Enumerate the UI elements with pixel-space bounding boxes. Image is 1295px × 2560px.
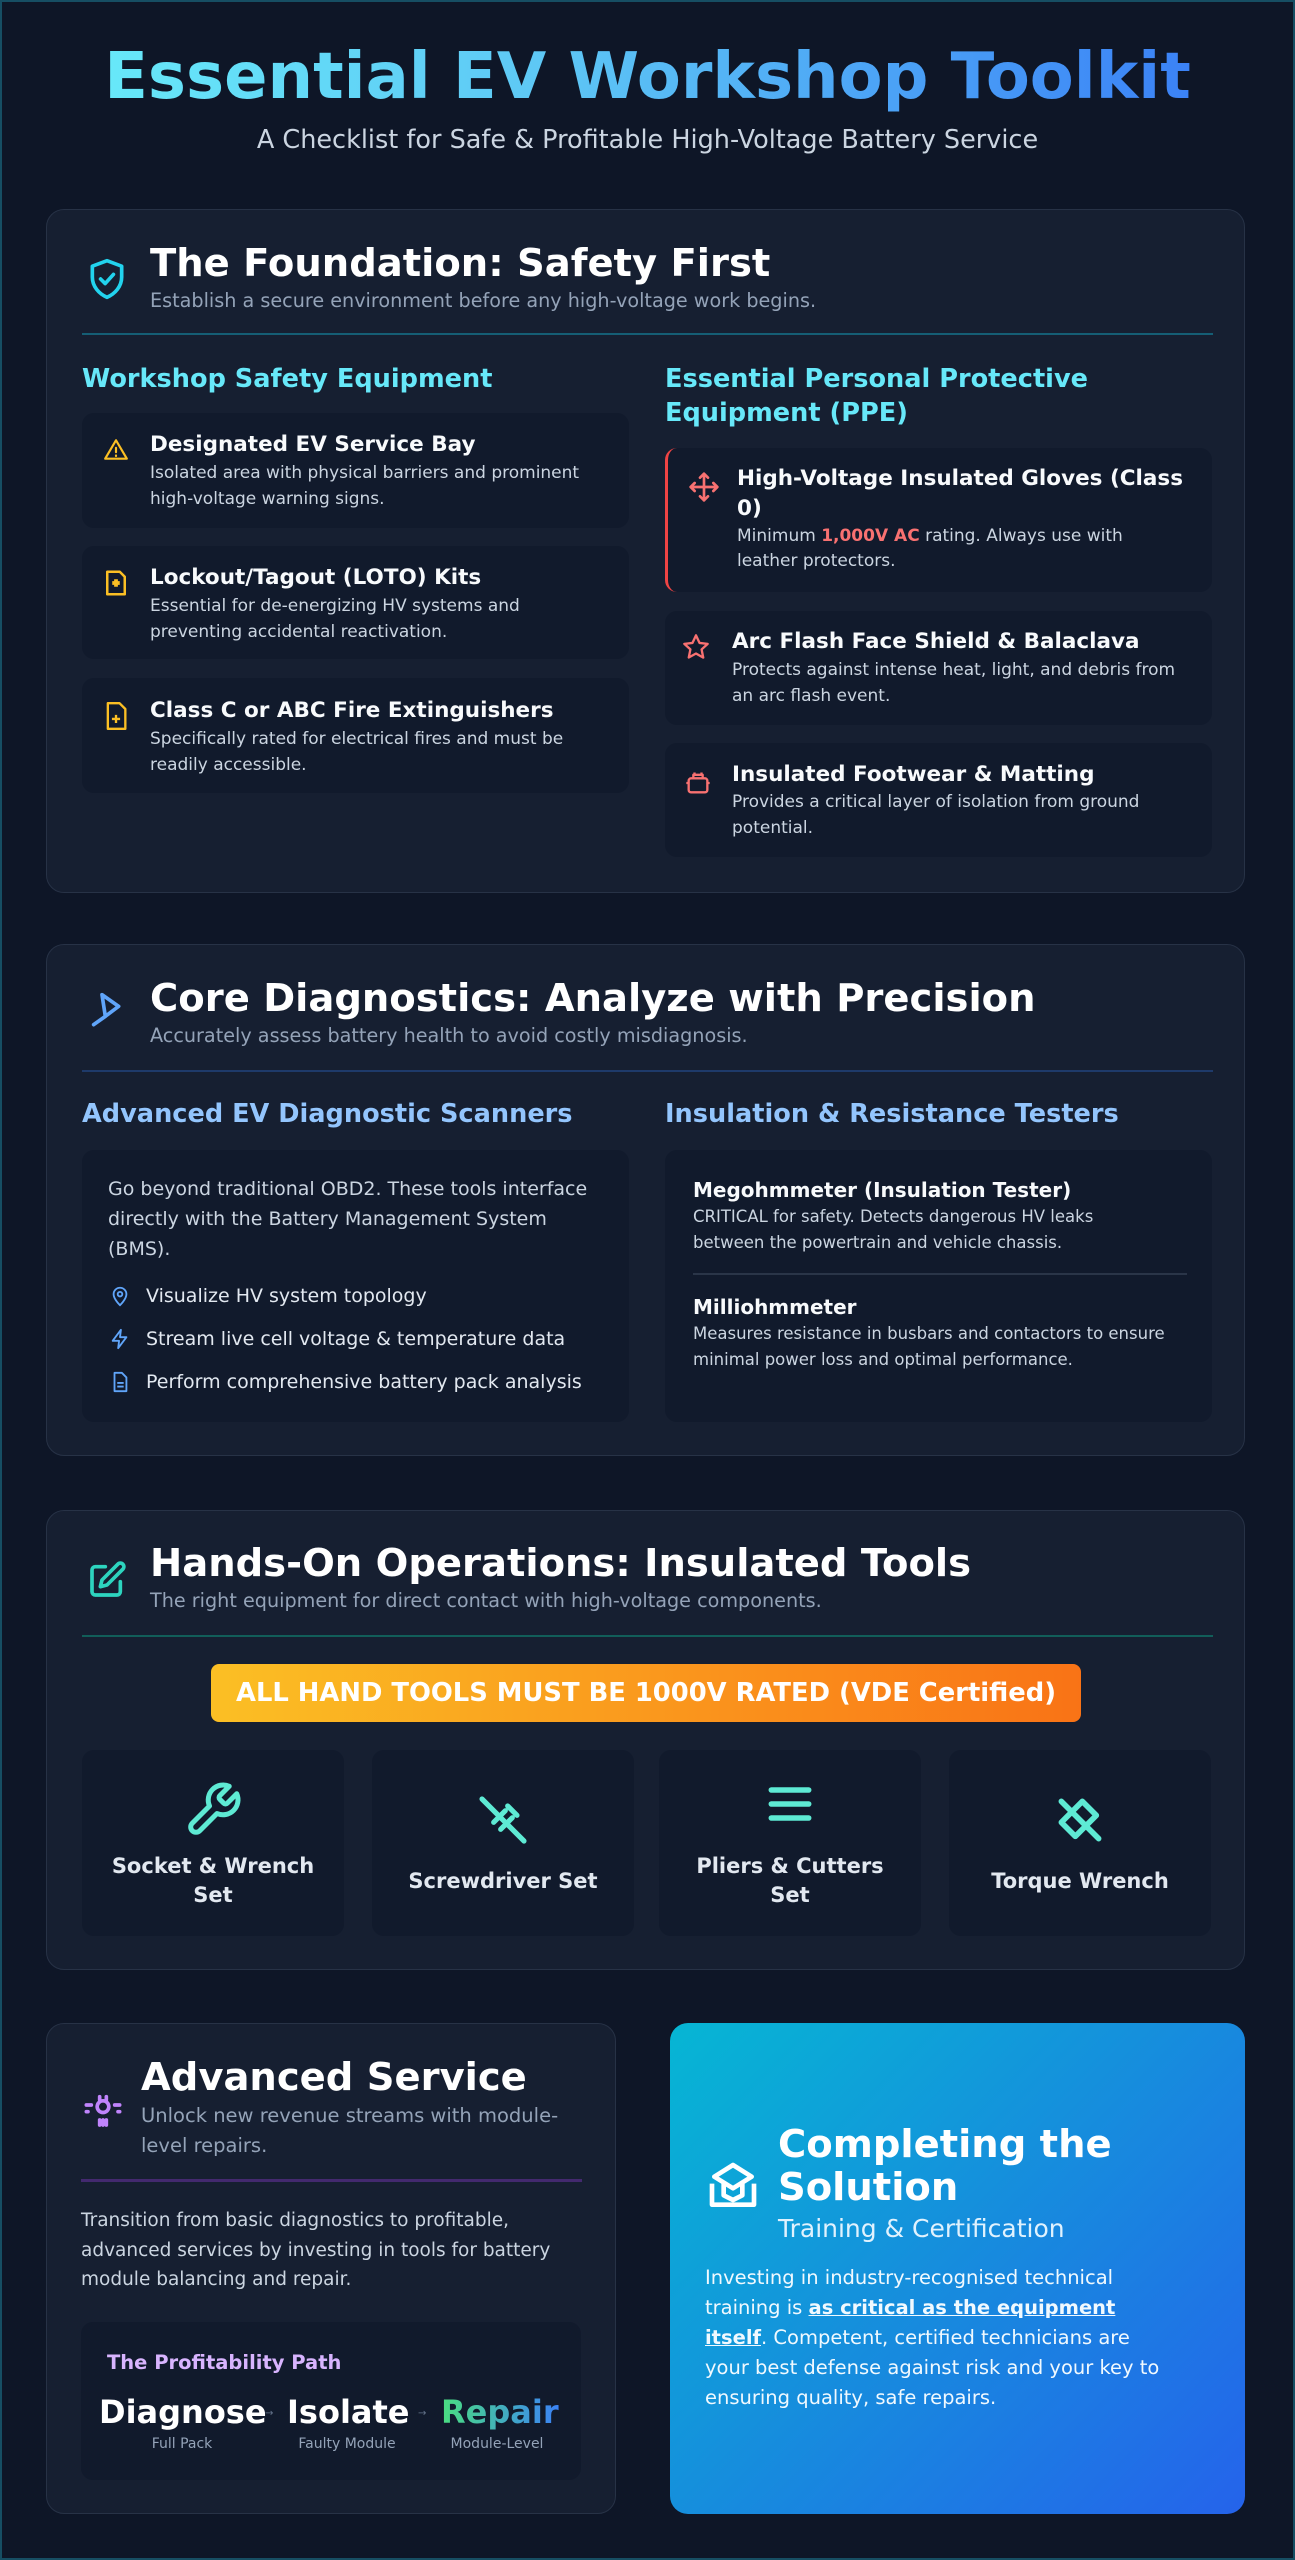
- tool card: socket wrench: Set: [193, 1883, 233, 1907]
- list: features: Perform comprehensive battery pack analysis: [146, 1371, 582, 1393]
- card: arc flash: Protects against intense heat, light, and debris from: [732, 660, 1175, 680]
- column heading: PPE: [665, 364, 1088, 428]
- list: features: Visualize HV system topology: [146, 1285, 427, 1307]
- banner: 1000V rated: [211, 1664, 1081, 1722]
- tool card: socket wrench: [82, 1750, 344, 1936]
- card: testers: CRITICAL for safety. Detects dangerous HV leaks: [693, 1207, 1093, 1226]
- card: extinguishers: Class C or ABC Fire Extinguishers: [150, 698, 554, 723]
- tool card: pliers: Set: [770, 1883, 810, 1907]
- icon: training cap: [710, 2162, 756, 2207]
- card: testers: [665, 1150, 1212, 1422]
- icon: chip: [84, 2094, 122, 2127]
- icon: bag: [686, 772, 710, 794]
- subtitle: A Checklist for Safe & Profitable High-Voltage Battery Service: [257, 125, 1038, 155]
- flow: diagnose isolate repair: Diagnose: [99, 2393, 267, 2431]
- card: LOTO: Essential for de-energizing HV systems and: [150, 596, 520, 616]
- text: training body: ensuring quality, safe repairs.: [705, 2386, 996, 2409]
- text: training body: training is as critical as the equipment: [705, 2296, 1115, 2319]
- list: features: [112, 1285, 582, 1393]
- heading: Hands-On Operations: Insulated Tools: [150, 1541, 971, 1586]
- subheading: The right equipment for direct contact with high-voltage components.: [150, 1589, 822, 1612]
- card: service bay: high-voltage warning signs.: [150, 489, 385, 509]
- card: profitability path: [81, 2322, 581, 2480]
- card: extinguishers: readily accessible.: [150, 755, 307, 775]
- card: testers: minimal power loss and optimal performance.: [693, 1350, 1073, 1369]
- flow: diagnose isolate repair: →: [418, 2408, 426, 2419]
- panel: insulated tools: [46, 1510, 1245, 1970]
- tool card: screwdriver: Screwdriver Set: [408, 1869, 598, 1893]
- card: gloves: High-Voltage Insulated Gloves (Class: [737, 466, 1183, 491]
- subheading: Unlock new revenue streams with module-: [141, 2104, 558, 2127]
- card: LOTO: preventing accidental reactivation.: [150, 622, 447, 642]
- text: training body: itself. Competent, certified technicians are: [705, 2326, 1130, 2349]
- icon: file plus: [106, 702, 126, 730]
- card: scanners: Go beyond traditional OBD2. These tools interface: [108, 1178, 587, 1200]
- card: arc flash: Arc Flash Face Shield & Balaclava: [732, 629, 1140, 654]
- column heading: scanners: Advanced EV Diagnostic Scanners: [82, 1099, 573, 1129]
- card: gloves: 0): [737, 496, 762, 521]
- card: gloves: [665, 448, 1212, 592]
- subheading: Establish a secure environment before any high-voltage work begins.: [150, 289, 816, 312]
- banner: 1000V rated: ALL HAND TOOLS MUST BE 1000V RATED (VDE Certified): [236, 1678, 1056, 1708]
- icon: star: [683, 634, 709, 659]
- panel: advanced service: [46, 2023, 616, 2514]
- column heading: testers: Insulation & Resistance Testers: [665, 1099, 1119, 1129]
- icon: screwdriver: [480, 1796, 526, 1844]
- icon: lock file: [106, 570, 126, 596]
- heading: Completing the: [778, 2122, 1112, 2167]
- icon: wrench: [188, 1782, 240, 1835]
- panel: safety first: [46, 209, 1245, 893]
- heading: Solution: [778, 2165, 958, 2210]
- card: testers: Measures resistance in busbars and contactors to ensure: [693, 1324, 1165, 1343]
- subheading: Accurately assess battery health to avoid costly misdiagnosis.: [150, 1024, 748, 1047]
- icon: edit: [90, 1561, 126, 1597]
- subheading: level repairs.: [141, 2134, 267, 2157]
- icon: bolt: [112, 1328, 128, 1350]
- card: footwear: Provides a critical layer of isolation from ground: [732, 792, 1139, 812]
- text: transition: [80, 2210, 550, 2290]
- tool card: socket wrench: Socket & Wrench: [112, 1854, 314, 1878]
- column heading: PPE: Essential Personal Protective: [665, 364, 1088, 394]
- card: service bay: Designated EV Service Bay: [150, 432, 475, 457]
- heading: [778, 2122, 1112, 2210]
- list: features: Stream live cell voltage & temperature data: [146, 1328, 565, 1350]
- text: transition: module balancing and repair.: [81, 2269, 351, 2290]
- card: extinguishers: Specifically rated for electrical fires and must be: [150, 729, 563, 749]
- card: scanners: directly with the Battery Management System: [108, 1208, 547, 1230]
- card: arc flash: [665, 611, 1212, 725]
- column heading: PPE: Equipment (PPE): [665, 398, 908, 428]
- tool card: torque wrench: Torque Wrench: [991, 1869, 1169, 1893]
- heading: The Foundation: Safety First: [150, 241, 770, 286]
- card: profitability path: The Profitability Path: [107, 2351, 341, 2374]
- icon: move arrows: [689, 472, 719, 502]
- card: footwear: potential.: [732, 818, 813, 838]
- flow: diagnose isolate repair: [99, 2393, 559, 2452]
- flow: diagnose isolate repair: Faulty Module: [298, 2436, 396, 2452]
- card: LOTO: Lockout/Tagout (LOTO) Kits: [150, 565, 481, 590]
- card: service bay: Isolated area with physical barriers and prominent: [150, 463, 579, 483]
- panel: core diagnostics: [46, 944, 1245, 1456]
- tool card: torque wrench: [949, 1750, 1211, 1936]
- flow: diagnose isolate repair: →: [265, 2408, 273, 2419]
- text: training body: your best defense against risk and your key to: [705, 2356, 1159, 2379]
- icon: document: [114, 1372, 128, 1392]
- flow: diagnose isolate repair: Repair: [441, 2393, 559, 2431]
- card: LOTO: [82, 546, 629, 659]
- text: training body: Investing in industry-recognised technical: [705, 2266, 1113, 2289]
- card: extinguishers: [82, 678, 629, 793]
- icon: cross tool: [1058, 1798, 1102, 1842]
- column heading: workshop: Workshop Safety Equipment: [82, 364, 492, 394]
- card: scanners: [82, 1150, 629, 1422]
- card: gloves: leather protectors.: [737, 551, 896, 571]
- card: service bay: [82, 413, 629, 528]
- tool card: pliers: [659, 1750, 921, 1936]
- card: arc flash: an arc flash event.: [732, 686, 890, 706]
- card: testers: between the powertrain and vehicle chassis.: [693, 1233, 1062, 1252]
- text: training body: [705, 2266, 1159, 2409]
- card: scanners: (BMS).: [108, 1238, 170, 1260]
- tool card: pliers: Pliers & Cutters: [696, 1854, 884, 1878]
- heading: Advanced Service: [141, 2055, 527, 2100]
- flow: diagnose isolate repair: Isolate: [287, 2393, 410, 2431]
- text: transition: Transition from basic diagnostics to profitable,: [81, 2210, 509, 2231]
- card: testers: Milliohmmeter: [693, 1295, 857, 1319]
- icon: probe: [92, 992, 121, 1027]
- card: footwear: Insulated Footwear & Matting: [732, 762, 1094, 787]
- icon: pin: [112, 1286, 128, 1306]
- card: testers: Megohmmeter (Insulation Tester): [693, 1178, 1071, 1202]
- tool card: screwdriver: [372, 1750, 634, 1936]
- flow: diagnose isolate repair: Full Pack: [152, 2436, 212, 2452]
- subheading: Training & Certification: [778, 2214, 1065, 2243]
- heading: Core Diagnostics: Analyze with Precision: [150, 976, 1036, 1021]
- card: footwear: [665, 743, 1212, 857]
- text: transition: advanced services by investing in tools for battery: [81, 2240, 550, 2260]
- icon: shield: [90, 258, 124, 300]
- title: Essential EV Workshop Toolkit: [104, 40, 1191, 114]
- panel: completing the solution: [670, 2023, 1245, 2514]
- icon: bars: [768, 1787, 812, 1821]
- flow: diagnose isolate repair: Module-Level: [451, 2436, 543, 2452]
- subheading: [141, 2104, 558, 2157]
- icon: warning: [104, 439, 128, 460]
- card: gloves: Minimum 1,000V AC rating. Always use with: [737, 526, 1123, 546]
